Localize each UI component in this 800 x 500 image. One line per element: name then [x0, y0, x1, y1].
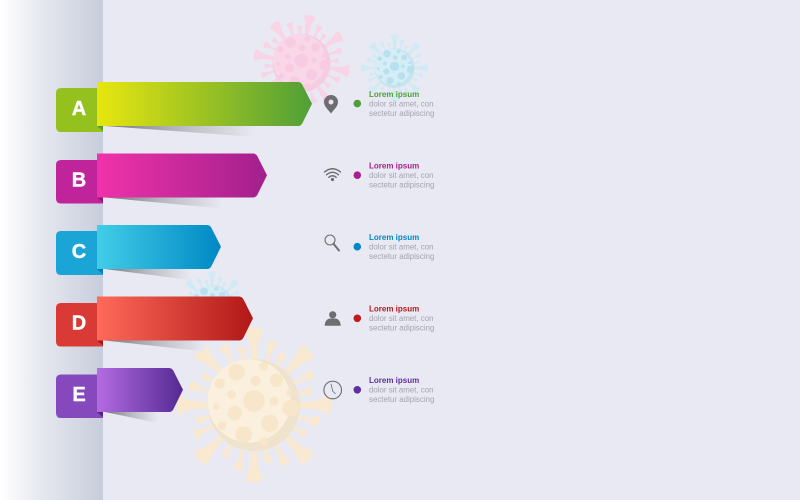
letter B: B [72, 170, 86, 192]
item D text: sectetur adipiscing [369, 323, 434, 332]
virus: large cream [176, 327, 332, 483]
item A text: Lorem ipsum [369, 90, 419, 99]
ribbon D [97, 296, 253, 340]
fold B [97, 198, 103, 202]
item A text: sectetur adipiscing [369, 109, 434, 118]
virus: light blue middle [177, 271, 247, 341]
letter D: D [72, 312, 86, 334]
dot C [354, 243, 361, 250]
item E text: sectetur adipiscing [369, 395, 434, 404]
shadow D [105, 340, 205, 352]
fold C [97, 269, 103, 274]
item C text [354, 233, 434, 261]
fold A [97, 126, 103, 131]
shadow E [105, 412, 158, 423]
dot B [354, 171, 361, 179]
item B text: Lorem ipsum [369, 161, 419, 170]
virus: pink [245, 7, 358, 119]
icon: wifi [324, 169, 340, 181]
row B [56, 154, 267, 208]
item C text: Lorem ipsum [369, 233, 419, 242]
item B text [354, 161, 434, 189]
letter C: C [72, 241, 86, 263]
item D text [354, 304, 434, 332]
row A [56, 82, 312, 137]
dot A [354, 100, 361, 107]
item B text: sectetur adipiscing [369, 180, 434, 189]
letter E: E [72, 384, 86, 406]
dot D [354, 314, 361, 322]
tab A [56, 88, 103, 132]
row C [56, 225, 221, 280]
shadow A [105, 126, 256, 137]
virus: light blue top [361, 35, 428, 101]
item E text: Lorem ipsum [369, 376, 419, 385]
icon: location pin [324, 95, 338, 114]
item B text: dolor sit amet, con [369, 171, 433, 180]
tab E [56, 374, 103, 418]
icon: magnifier [325, 235, 339, 250]
letter A: A [72, 98, 86, 120]
item D text: dolor sit amet, con [369, 314, 433, 323]
fold E [97, 412, 103, 417]
tab D [56, 303, 103, 346]
item A text [354, 90, 434, 118]
item C text: sectetur adipiscing [369, 252, 434, 261]
item A text: dolor sit amet, con [369, 99, 433, 108]
item D text: Lorem ipsum [369, 304, 419, 313]
item E text [354, 376, 434, 404]
left gradient band [0, 0, 103, 500]
fold D [97, 340, 103, 346]
tab C [56, 231, 103, 275]
ribbon B [97, 154, 267, 198]
tab B [56, 160, 103, 204]
ribbon E [97, 368, 183, 412]
icon: person [325, 311, 341, 326]
shadow C [105, 269, 190, 280]
shadow B [105, 198, 222, 208]
item E text: dolor sit amet, con [369, 385, 433, 394]
row E [56, 368, 183, 423]
icon: clock [324, 381, 342, 399]
ribbon C [97, 225, 221, 269]
item C text: dolor sit amet, con [369, 242, 433, 251]
ribbon A [97, 82, 312, 126]
row D [56, 296, 253, 352]
dot E [354, 386, 361, 394]
